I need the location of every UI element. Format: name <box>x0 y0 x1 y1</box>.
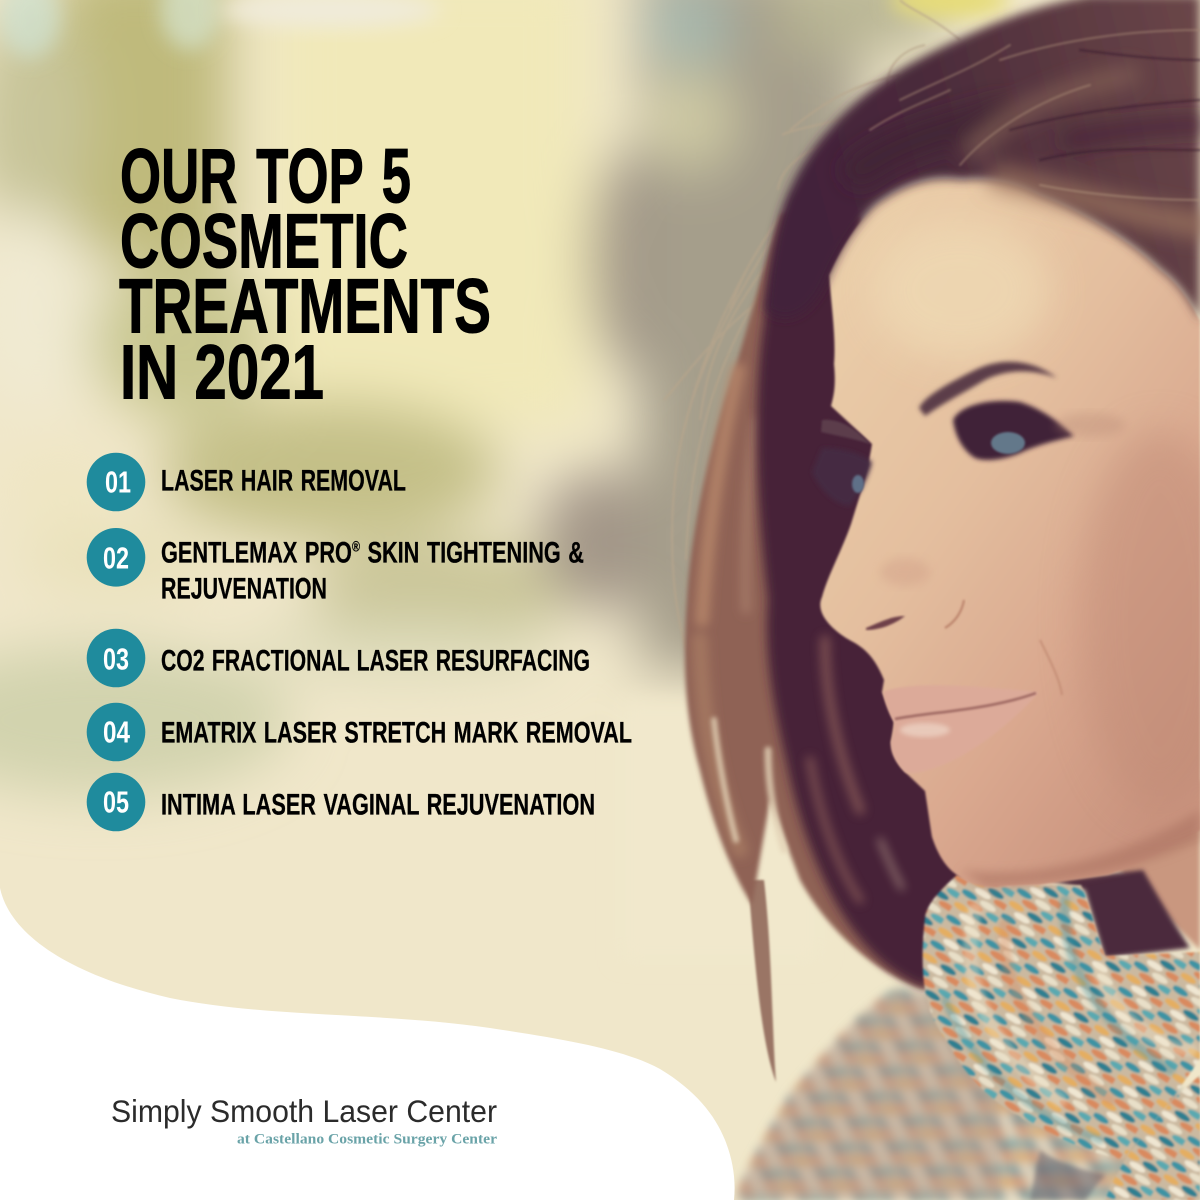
top hair <box>765 0 1200 321</box>
nostril <box>866 616 905 630</box>
logo: Simply Smooth Laser Center <box>111 1093 497 1129</box>
near eye <box>953 401 1074 460</box>
item 05 <box>87 773 595 831</box>
item 05: INTIMA LASER VAGINAL REJUVENATION <box>161 788 595 822</box>
smile line <box>1040 640 1062 695</box>
far brow <box>821 420 870 444</box>
fine hair strands <box>870 30 1200 200</box>
title: IN 2021 <box>120 330 324 416</box>
title <box>119 134 491 416</box>
hair sheen <box>810 640 902 900</box>
title: OUR TOP 5 <box>120 134 411 220</box>
item 04: 04 <box>103 716 130 750</box>
face <box>820 179 1200 887</box>
white wave panel <box>0 888 735 1200</box>
right scarf strand <box>1105 1075 1200 1200</box>
thin hair strand <box>748 880 776 1082</box>
neck <box>1040 780 1200 950</box>
nose shade <box>880 558 930 586</box>
lip gloss <box>900 723 950 737</box>
hair soft tones <box>860 75 1200 225</box>
logo <box>111 1093 498 1148</box>
item 03 <box>87 629 590 687</box>
item 03: CO2 FRACTIONAL LASER RESURFACING <box>161 644 590 678</box>
item 02: 02 <box>103 542 129 576</box>
far eye <box>812 448 872 506</box>
upper scarf coil <box>923 875 1200 1159</box>
item 01 <box>87 453 406 511</box>
item 05: 05 <box>103 786 129 820</box>
far eye iris <box>852 475 864 493</box>
wispy outer hair <box>664 0 960 660</box>
title: COSMETIC <box>120 198 408 284</box>
item 02: SKIN TIGHTENING & <box>360 536 584 570</box>
scarf stripes <box>945 900 1190 1140</box>
item 02: GENTLEMAX PRO <box>161 536 425 570</box>
treatment list <box>87 453 632 831</box>
neck shadow <box>1050 870 1190 958</box>
orange highlight streaks <box>700 370 756 850</box>
chin shade <box>960 810 1200 887</box>
dark hair core <box>757 190 1000 988</box>
item 02 <box>87 528 584 606</box>
lower blurred scarf <box>736 990 1200 1200</box>
logo: at Castellano Cosmetic Surgery Center <box>237 1132 498 1148</box>
item 02: ® <box>352 538 360 556</box>
lip line <box>895 693 1036 719</box>
hair light gaps <box>714 720 784 850</box>
right cheek shading <box>1080 430 1200 810</box>
woman portrait <box>664 0 1200 1200</box>
forehead highlight <box>870 220 1050 360</box>
iris <box>991 432 1025 454</box>
hair mass <box>685 200 1000 990</box>
eye shadow <box>1055 413 1125 437</box>
item 02: REJUVENATION <box>161 572 327 606</box>
item 04: EMATRIX LASER STRETCH MARK REMOVAL <box>161 716 632 750</box>
item 03: 03 <box>103 642 129 676</box>
nose wing <box>945 600 964 628</box>
item 04 <box>87 703 632 761</box>
lips <box>883 685 1039 773</box>
title: TREATMENTS <box>119 264 491 350</box>
item 01: LASER HAIR REMOVAL <box>161 464 406 498</box>
near brow <box>919 362 1057 416</box>
item 01: 01 <box>105 466 131 500</box>
scarf fold dark <box>1030 1150 1105 1200</box>
